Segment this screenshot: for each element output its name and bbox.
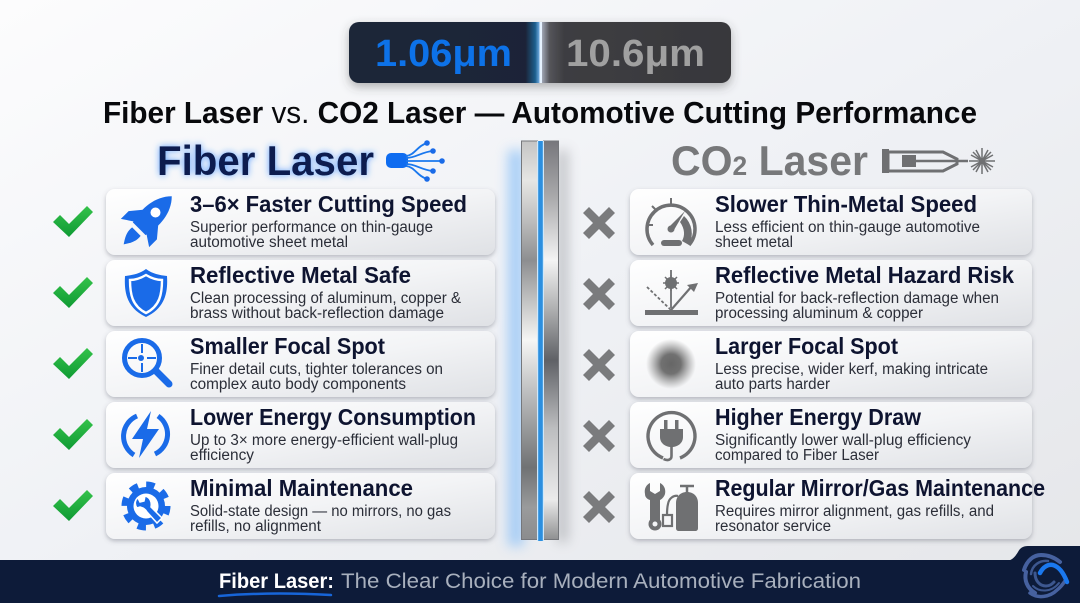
divider pillar xyxy=(508,141,568,546)
panel: CO2 Laser drawbacks xyxy=(583,189,1045,539)
footer banner: The Clear Choice for Modern Automotive Fabrication xyxy=(341,570,861,593)
row: larger focal spot: Less precise, wider kerf, making intricate xyxy=(715,361,988,378)
icon: swirl logo xyxy=(1024,555,1067,597)
row: minimal maintenance: refills, no alignment xyxy=(190,518,322,535)
panel: Fiber Laser advantages xyxy=(53,182,495,539)
wavelength badge xyxy=(349,22,731,83)
row: reflective metal safe: Clean processing of aluminum, copper & xyxy=(190,290,462,307)
row: reflective hazard xyxy=(583,260,1032,326)
title: Fiber Laser vs. CO2 Laser — Automotive Cutting Performance xyxy=(103,95,977,130)
row: reflective hazard: processing aluminum & copper xyxy=(715,305,923,322)
row: higher energy draw: Higher Energy Draw xyxy=(715,404,921,430)
row: regular maintenance: Regular Mirror/Gas Maintenance xyxy=(715,475,1045,501)
row: slower speed: Slower Thin-Metal Speed xyxy=(715,191,977,217)
row: faster cutting speed: automotive sheet metal xyxy=(190,234,348,251)
row: lower energy consumption: efficiency xyxy=(190,447,254,464)
icon: fiber optic cable xyxy=(386,140,445,182)
row: slower speed xyxy=(583,189,1032,255)
row: lower energy consumption: Lower Energy Consumption xyxy=(190,404,476,430)
wavelength badge: 1.06μm xyxy=(375,33,512,75)
row: minimal maintenance: Minimal Maintenance xyxy=(190,475,413,501)
row: smaller focal spot: Smaller Focal Spot xyxy=(190,333,385,359)
row: higher energy draw: compared to Fiber Laser xyxy=(715,447,879,464)
row: lower energy consumption xyxy=(53,402,495,468)
heading: Fiber Laser: Fiber Laser xyxy=(157,137,374,184)
row: smaller focal spot xyxy=(53,331,495,397)
row: larger focal spot xyxy=(583,331,1032,397)
footer banner xyxy=(0,546,1080,603)
row: reflective metal safe: Reflective Metal Safe xyxy=(190,262,411,288)
footer banner: Fiber Laser: xyxy=(219,570,334,593)
row: reflective hazard: Potential for back-reflection damage when xyxy=(715,290,999,307)
row: reflective metal safe xyxy=(53,260,495,326)
row: minimal maintenance xyxy=(53,473,495,539)
row: slower speed: Less efficient on thin-gauge automotive xyxy=(715,219,980,236)
row: minimal maintenance: Solid-state design — no mirrors, no gas xyxy=(190,503,451,520)
heading: CO2 Laser: CO2 Laser xyxy=(671,137,868,184)
row: higher energy draw xyxy=(583,402,1032,468)
row: regular maintenance xyxy=(583,473,1045,539)
row: faster cutting speed: Superior performance on thin-gauge xyxy=(190,219,433,236)
row: larger focal spot: auto parts harder xyxy=(715,376,830,393)
row: regular maintenance: resonator service xyxy=(715,518,831,535)
row: faster cutting speed: 3–6× Faster Cutting Speed xyxy=(190,191,467,217)
row: faster cutting speed xyxy=(53,182,495,258)
row: regular maintenance: Requires mirror alignment, gas refills, and xyxy=(715,503,994,520)
row: smaller focal spot: complex auto body components xyxy=(190,376,406,393)
row: higher energy draw: Significantly lower wall-plug efficiency xyxy=(715,432,971,449)
row: smaller focal spot: Finer detail cuts, tighter tolerances on xyxy=(190,361,443,378)
row: slower speed: sheet metal xyxy=(715,234,793,251)
icon: CO2 laser tube xyxy=(882,148,995,174)
wavelength badge: 10.6μm xyxy=(566,33,705,75)
row: lower energy consumption: Up to 3× more energy-efficient wall-plug xyxy=(190,432,458,449)
row: larger focal spot: Larger Focal Spot xyxy=(715,333,898,359)
row: reflective metal safe: brass without back-reflection damage xyxy=(190,305,444,322)
row: reflective hazard: Reflective Metal Hazard Risk xyxy=(715,262,1014,288)
